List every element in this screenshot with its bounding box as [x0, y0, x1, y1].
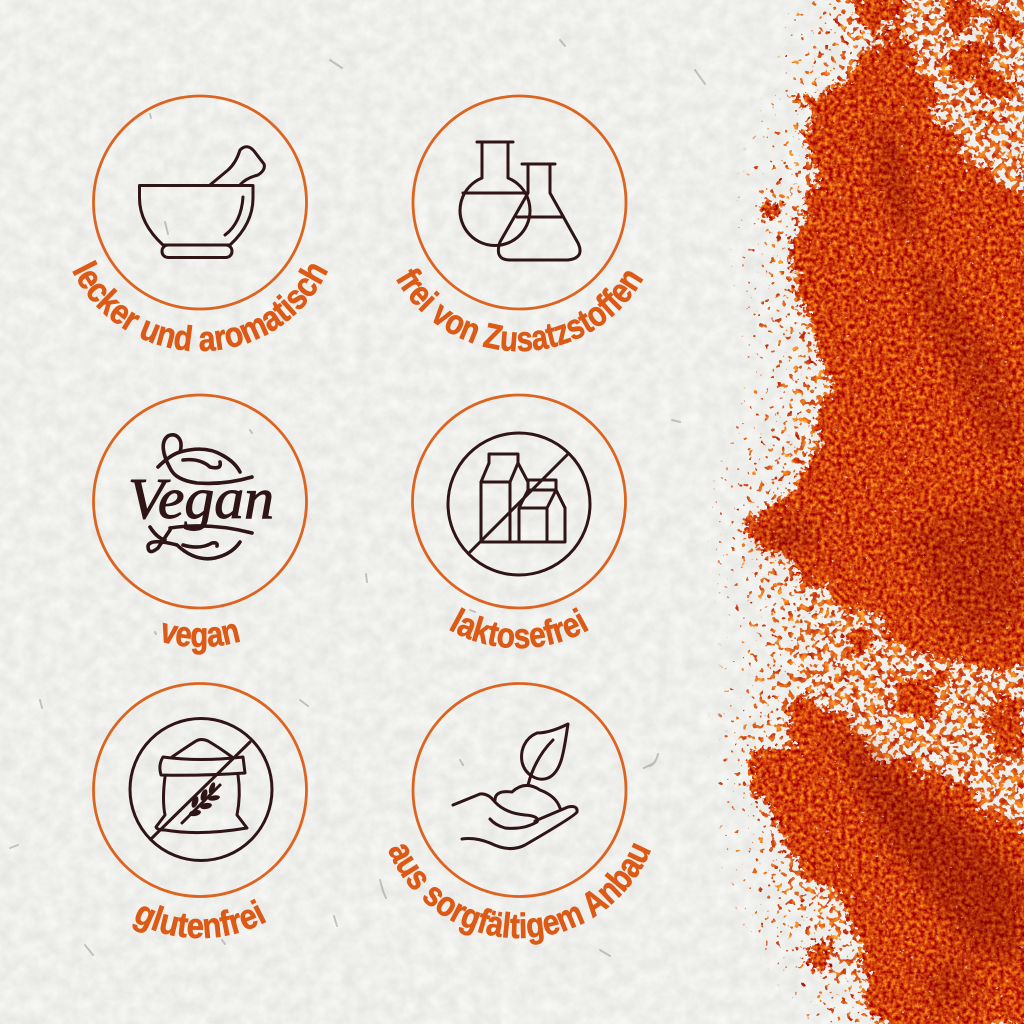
panel: frei von Zusatzstoffen [396, 94, 644, 352]
powder: dense masses [743, 0, 1024, 1024]
icon: mortar and pestle [140, 147, 264, 258]
icon: hand holding seedling [453, 724, 577, 849]
label: aus sorgfältigem Anbau [388, 842, 651, 945]
panel: aus sorgfältigem Anbau [388, 682, 651, 945]
ring [94, 684, 306, 896]
label: frei von Zusatzstoffen [396, 268, 644, 352]
icon: crossed flour sack [130, 718, 272, 860]
panel: vegan [92, 394, 308, 655]
powder: scattered flecks [745, 0, 1024, 1024]
icon: crossed milk cartons [448, 433, 590, 575]
label: lecker und aromatisch [72, 260, 328, 352]
ring [412, 395, 626, 608]
ring [413, 96, 626, 309]
ring [94, 395, 306, 608]
panel: laktosefrei [411, 394, 627, 649]
paper specks [10, 40, 705, 956]
label: laktosefrei [449, 607, 589, 649]
icon: lab flasks [460, 142, 580, 260]
icon: vegan lettering with leaves: Vegan [128, 466, 274, 531]
panel: lecker und aromatisch [72, 94, 328, 352]
ring [94, 96, 306, 309]
panel: glutenfrei [92, 682, 308, 938]
label: vegan [162, 622, 240, 655]
powder: dark shading [762, 120, 1024, 1011]
ring [413, 684, 626, 896]
icon: vegan lettering with leaves [128, 435, 274, 559]
label: glutenfrei [132, 898, 266, 938]
paprika powder [743, 0, 1024, 1024]
